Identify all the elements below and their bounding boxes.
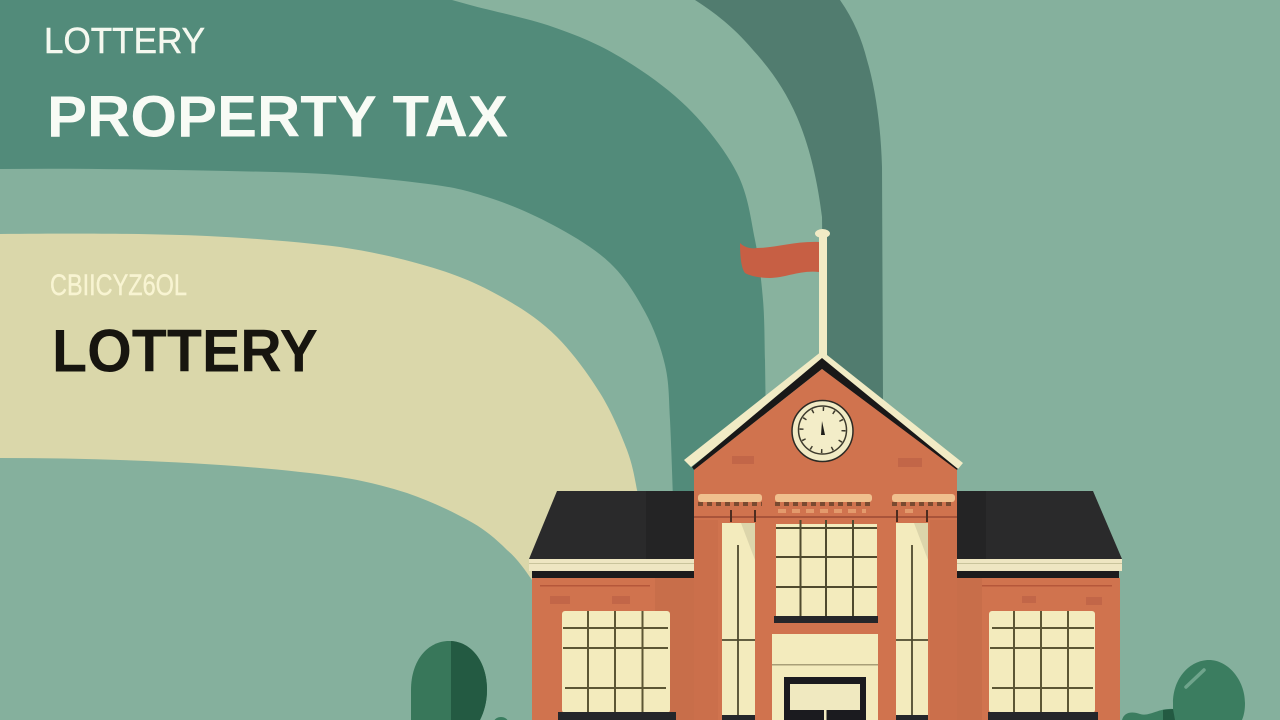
band: slate arc behind the flag bbox=[695, 0, 883, 400]
heading: small lottery label: LOTTERY bbox=[44, 20, 205, 61]
left narrow window bbox=[722, 523, 755, 720]
band: cream panel for lottery bbox=[0, 234, 640, 600]
icon: right tree and shrub bbox=[1122, 660, 1245, 720]
central window bbox=[774, 520, 878, 623]
flagpole bbox=[815, 229, 830, 356]
entrance bbox=[772, 634, 878, 720]
left window bbox=[558, 611, 676, 720]
band: dark green panel for property tax bbox=[0, 0, 767, 500]
flag bbox=[740, 242, 819, 278]
right window bbox=[988, 611, 1098, 720]
icon: school building bbox=[529, 229, 1122, 720]
clock bbox=[792, 400, 853, 462]
right wing bbox=[957, 491, 1122, 720]
heading: lottery: LOTTERY bbox=[52, 318, 318, 384]
text: garbled caption: CBIICYZ6OL bbox=[50, 269, 187, 302]
icon: left tree bbox=[411, 641, 508, 720]
pediment roof bbox=[684, 351, 963, 469]
band: light green arc bbox=[452, 0, 824, 500]
left wing bbox=[529, 491, 695, 720]
dentil cornice bbox=[698, 494, 955, 511]
heading: property tax: PROPERTY TAX bbox=[47, 84, 508, 150]
right narrow window bbox=[896, 523, 928, 720]
central block bbox=[684, 351, 963, 720]
